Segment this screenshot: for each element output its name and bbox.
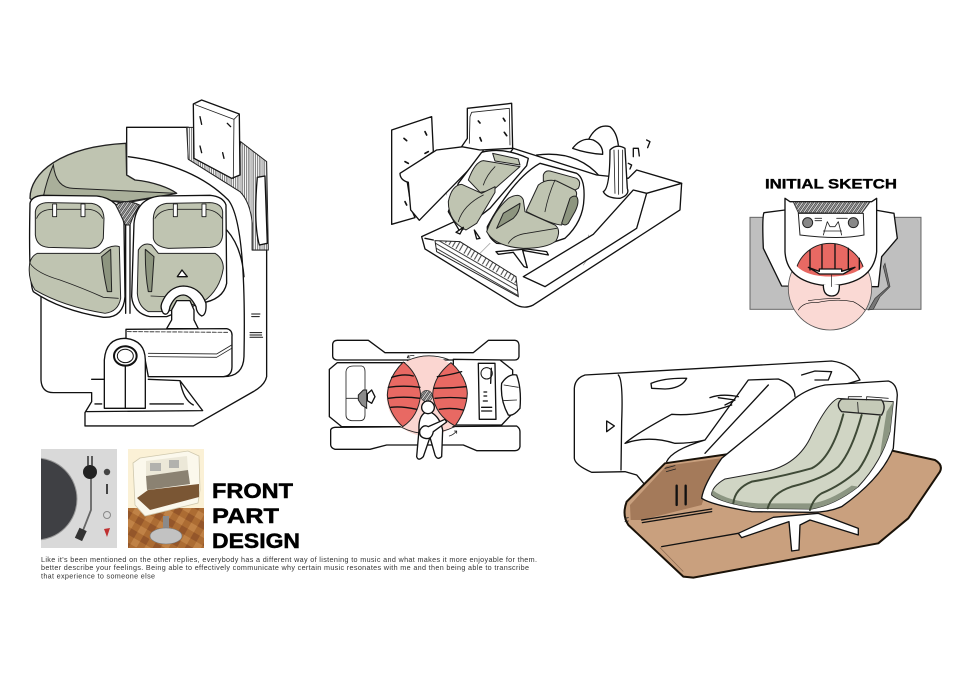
photo: retro record console — [128, 449, 204, 548]
seat cushion — [712, 398, 893, 509]
curved shell lines — [128, 157, 244, 377]
pink circle — [387, 356, 467, 436]
red chair — [796, 242, 864, 277]
left cabin panel — [329, 363, 405, 427]
head outline — [823, 285, 839, 296]
top rail — [333, 340, 519, 360]
caption text: Like it's been mentioned on the other replies, everybody has a different way of listening to music and what makes it more enjoyable for them. — [41, 555, 537, 564]
title: front part design: PART — [212, 505, 279, 528]
hatched floor edge — [435, 241, 518, 297]
seat shadow — [712, 486, 858, 509]
initial sketch heading: INITIAL SKETCH — [765, 176, 897, 192]
brown floor — [625, 448, 941, 578]
hatched rear band — [187, 127, 268, 250]
photo: turntable — [41, 449, 117, 548]
main white body — [41, 127, 267, 426]
chair ribs — [388, 372, 466, 410]
left wall panel — [392, 117, 433, 224]
bottom rail — [331, 426, 520, 451]
base plinth — [87, 314, 263, 412]
centre hatch — [421, 390, 432, 402]
guitar player — [417, 401, 447, 459]
star base — [496, 249, 548, 268]
device shoulders — [763, 210, 897, 287]
background shell outline — [574, 361, 860, 485]
sketch: side view with brown floor — [574, 361, 941, 578]
platform base — [422, 148, 682, 307]
seat stripes — [733, 414, 880, 510]
rear wall panel — [462, 103, 513, 150]
left seat — [29, 195, 125, 317]
grey floor — [750, 217, 921, 309]
rear dome — [537, 154, 600, 188]
U frame — [785, 198, 877, 286]
title: front part design — [212, 480, 300, 553]
caption text: that experience to someone else — [41, 572, 155, 580]
music notes — [628, 140, 650, 169]
red chair right — [433, 363, 467, 426]
inner brown wall — [630, 457, 733, 520]
floor lines — [642, 453, 890, 547]
right shell — [487, 163, 584, 247]
speaker tower — [104, 338, 145, 408]
title: front part design: FRONT — [212, 480, 293, 503]
side wall shadow — [868, 263, 890, 310]
sketch: top plan with guitar player — [329, 340, 520, 459]
front ramp — [523, 190, 647, 287]
sketch: isometric double chair capsule — [392, 103, 682, 307]
star base — [738, 513, 858, 551]
pink person circle — [788, 247, 872, 330]
side slot — [256, 176, 267, 245]
arm rest hoop — [161, 286, 206, 329]
red chair left — [387, 362, 421, 427]
right seat — [132, 195, 227, 317]
rotation arrows — [407, 355, 457, 436]
chair shell — [702, 381, 897, 512]
shell shadow — [43, 165, 177, 202]
right chair — [487, 171, 580, 248]
rear hatch — [793, 202, 870, 213]
title: front part design: DESIGN — [212, 530, 300, 553]
caption text — [41, 555, 537, 580]
left chair — [448, 153, 520, 239]
pink circle top arc — [402, 356, 455, 433]
wall-mounted panel — [193, 100, 240, 178]
sketch: initial top view — [750, 198, 921, 330]
column lamp — [573, 126, 628, 198]
sketch: front part view of the capsule — [29, 100, 268, 426]
divider bench — [400, 147, 483, 220]
right cabin panel — [453, 359, 520, 425]
console — [126, 329, 232, 377]
left shell — [448, 150, 528, 232]
faint floor seams — [445, 168, 592, 265]
platform fold lines — [425, 183, 682, 240]
head pillow — [838, 397, 888, 415]
caption text: better describe your feelings. Being able to effectively communicate why certain music resonates with me and then being able to transcribe — [41, 563, 529, 572]
control deck — [798, 213, 864, 237]
head rest and seat bar — [808, 267, 855, 274]
upholstered shell back — [30, 143, 177, 203]
center hatch detail — [116, 202, 139, 225]
